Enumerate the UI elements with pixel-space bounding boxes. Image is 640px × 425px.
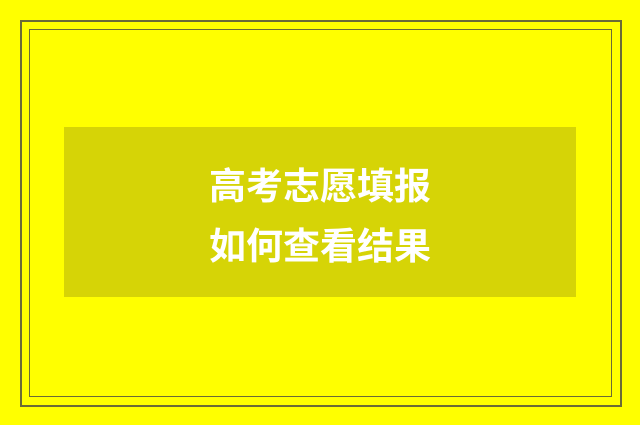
title panel [64,127,576,297]
inner frame [29,29,612,397]
title text [209,166,431,266]
title text: 如何查看结果 [209,226,431,266]
title text: 高考志愿填报 [209,166,431,207]
